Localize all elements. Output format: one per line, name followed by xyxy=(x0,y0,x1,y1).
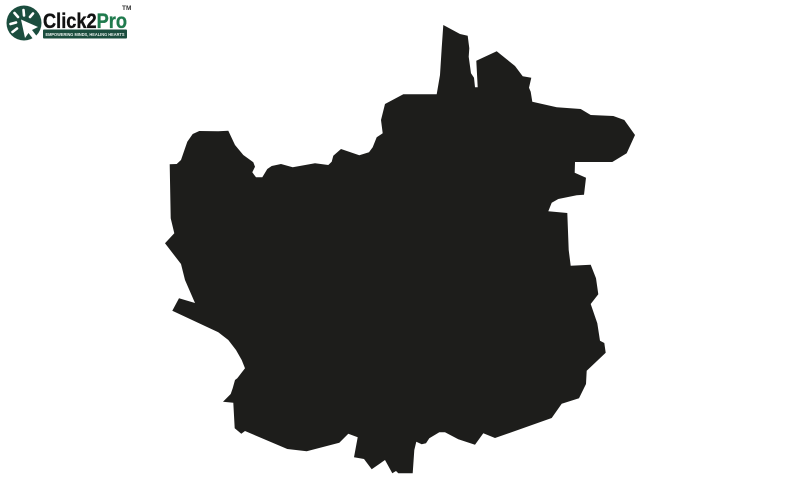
map silhouette xyxy=(165,25,635,473)
logo wordmark: Click2Pro xyxy=(43,10,127,33)
icon: green circle with cursor and rays xyxy=(6,6,42,40)
logo: Click2Pro xyxy=(6,5,131,40)
trademark mark: TM xyxy=(122,5,131,12)
tagline bar: EMPOWERING MINDS, HEALING HEARTS xyxy=(46,32,125,38)
